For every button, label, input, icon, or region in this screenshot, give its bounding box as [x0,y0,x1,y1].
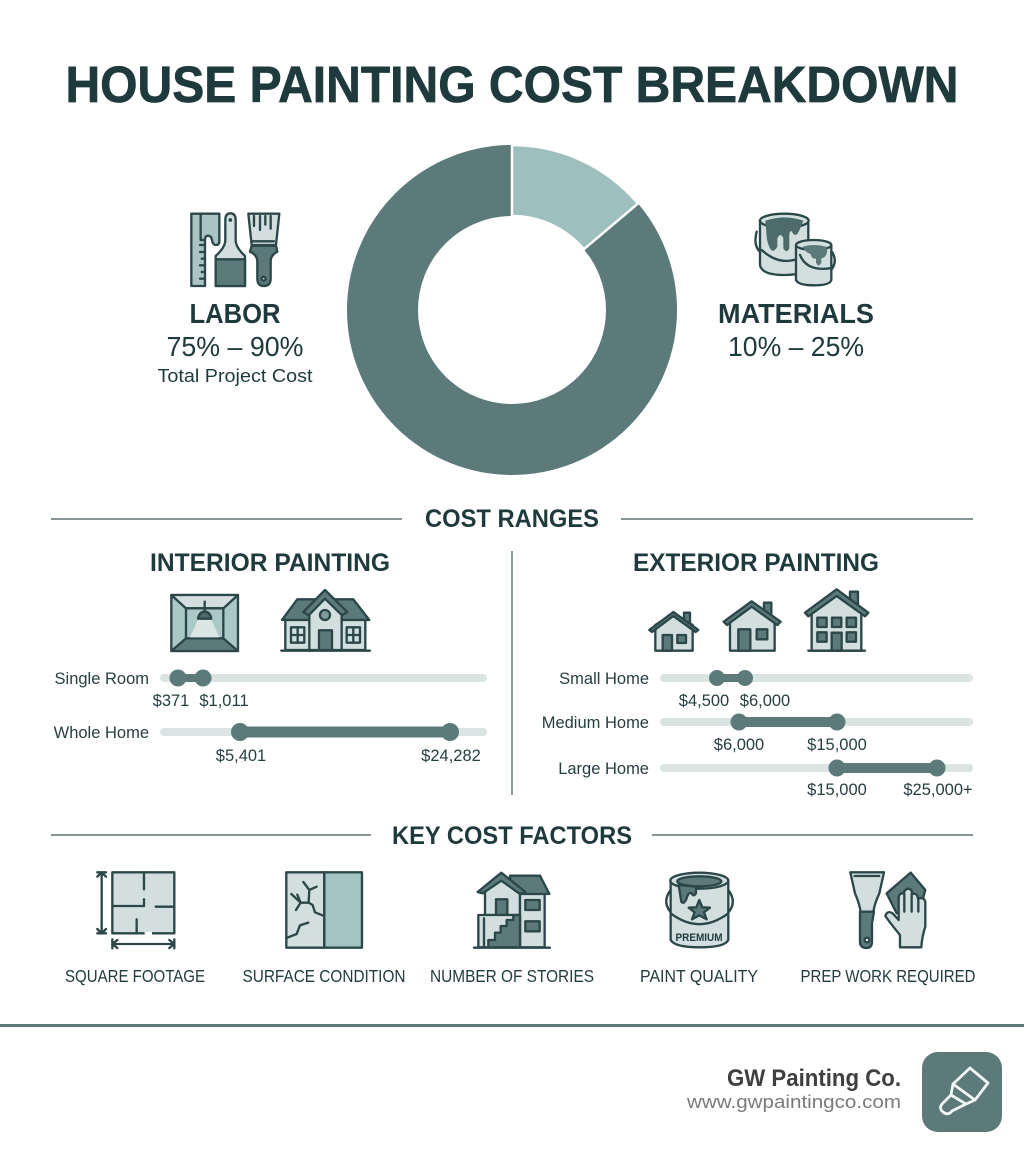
heading: cost ranges: COST RANGES [425,505,599,533]
panel: exterior painting [542,549,973,799]
range: large home [558,760,973,799]
panel: key cost factors [65,872,976,986]
range: small home: Small Home [559,670,649,688]
range: small home: $6,000 [740,692,790,710]
range: medium home: Medium Home [542,714,649,732]
text: labor [158,298,312,386]
factor: prep work required: PREP WORK REQUIRED [800,966,976,986]
factor: square footage [65,872,205,986]
icon: room with lamp [171,595,238,651]
icon: labor tools [191,213,279,286]
wide brush [248,214,279,245]
range: single room [55,670,487,710]
heading: exterior painting: EXTERIOR PAINTING [633,549,879,577]
range: large home: Large Home [558,760,649,778]
text: labor: Total Project Cost [158,365,312,386]
factor: paint quality [640,873,758,986]
range: medium home: $6,000 [714,736,764,754]
text: labor: LABOR [190,298,280,329]
range: single room: $371 [153,692,189,710]
text: materials: 10% – 25% [728,331,864,362]
small can [828,250,835,273]
large can [755,232,762,253]
range: medium home: $15,000 [807,736,867,754]
factor: prep work required [800,872,976,986]
range: single room: $1,011 [199,692,249,710]
donut ring: labor [382,180,642,440]
factor: paint quality: PREMIUM [676,932,722,944]
factor: paint quality: PAINT QUALITY [640,966,758,986]
icon: logo brush [922,1052,1002,1132]
range: large home: $15,000 [807,781,867,799]
text: materials: MATERIALS [718,298,874,329]
footer: company name: GW Painting Co. [727,1065,901,1092]
range: small home [559,670,973,710]
ruler [191,214,219,286]
range: single room: Single Room [55,670,149,688]
icon: paint cans [755,214,835,285]
donut chart: labor vs materials [382,145,642,440]
title: HOUSE PAINTING COST BREAKDOWN [66,56,958,113]
range: large home: $25,000+ [903,781,973,799]
range: whole home: $24,282 [421,747,481,765]
footer: company name: www.gwpaintingco.com [686,1091,901,1112]
range: whole home: Whole Home [54,724,149,742]
footer: company name [686,1065,901,1112]
donut segment: materials [512,145,638,249]
factor: number of stories [430,873,594,986]
factor: surface condition: SURFACE CONDITION [242,966,406,986]
icon: small house [649,612,698,651]
factor: number of stories: NUMBER OF STORIES [430,966,594,986]
text: materials [718,298,874,362]
factor: surface condition [242,872,406,986]
text: labor: 75% – 90% [166,331,304,362]
range: whole home [54,723,487,765]
icon: large house [805,589,868,651]
range: medium home [542,714,973,754]
factor: square footage: SQUARE FOOTAGE [65,966,205,986]
range: whole home: $5,401 [216,747,266,765]
footer divider [0,1024,1024,1027]
paint brush [216,213,245,286]
icon: whole home [281,590,370,651]
range: small home: $4,500 [679,692,729,710]
heading: key cost factors: KEY COST FACTORS [392,822,632,850]
heading: interior painting: INTERIOR PAINTING [150,549,390,577]
panel: interior painting [54,549,487,765]
icon: medium house [724,601,781,651]
